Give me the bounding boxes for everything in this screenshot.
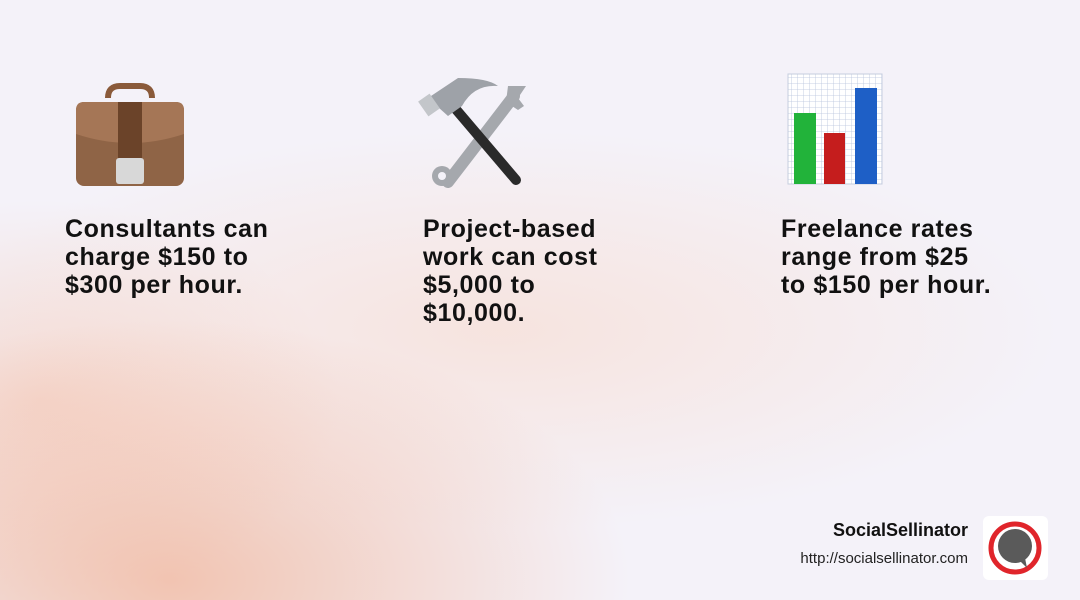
icon: bar chart [788, 74, 882, 184]
brand name: SocialSellinator [833, 520, 968, 540]
icon: briefcase [76, 83, 184, 186]
text: freelance: Freelance rates range from $25 to $150 per hour. [781, 215, 991, 299]
text: consultants: Consultants can charge $150 to $300 per hour. [65, 215, 268, 299]
logo [983, 516, 1048, 580]
icon: hammer and wrench [418, 78, 526, 188]
brand url: http://socialsellinator.com [800, 550, 968, 567]
text: project-based: Project-based work can cost $5,000 to $10,000. [423, 215, 598, 327]
